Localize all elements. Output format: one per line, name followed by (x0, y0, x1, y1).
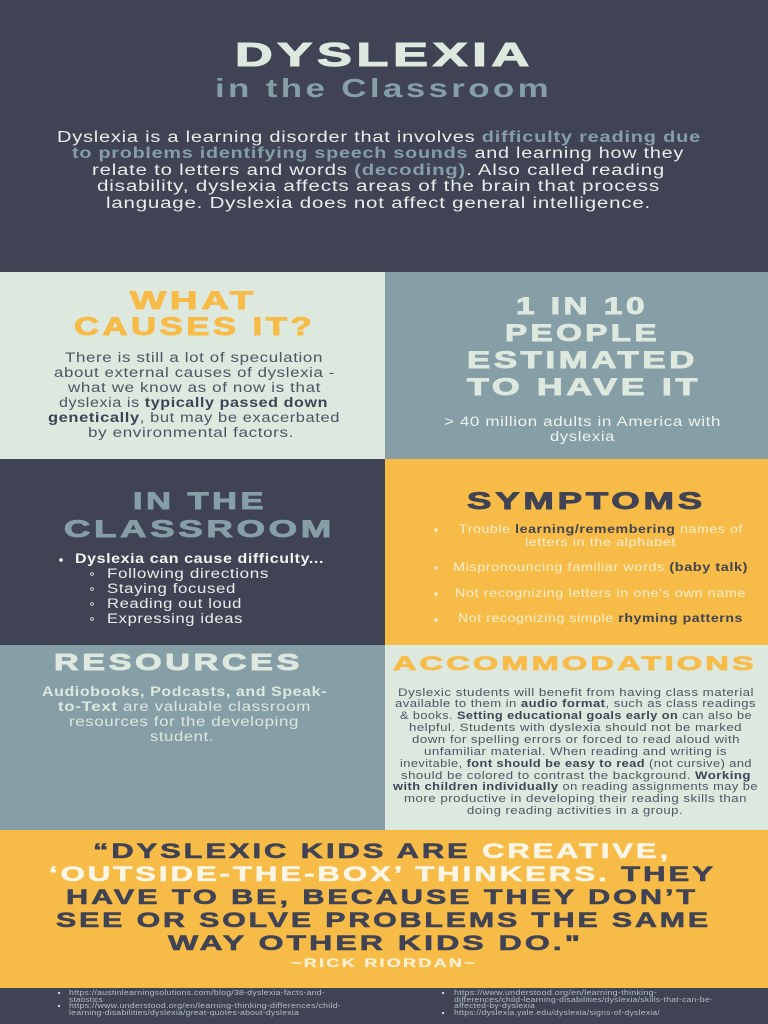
sources left column: https://www.understood.org/en/learning-thinking-differences/child- (69, 1003, 342, 1010)
quote attribution: ~RICK RIORDAN~ (291, 956, 477, 970)
symptoms list: Trouble learning/remembering names of (459, 522, 743, 536)
classroom list: Expressing ideas (107, 611, 243, 626)
heading: resources: RESOURCES (54, 649, 303, 675)
statistic heading: TO HAVE IT (467, 374, 701, 401)
classroom list: Staying focused (107, 581, 236, 596)
title: DYSLEXIA (235, 36, 534, 73)
statistic detail: > 40 million adults in America with (444, 414, 721, 429)
heading: accommodations: ACCOMMODATIONS (393, 654, 757, 675)
panel: quote (0, 830, 768, 988)
causes text: by environmental factors. (88, 425, 294, 440)
intro paragraph: relate to letters and words (decoding) . Also called reading (92, 162, 665, 179)
causes text: about external causes of dyslexia - (54, 365, 335, 380)
panel: 1 in 10 statistic (385, 272, 768, 459)
classroom list (59, 551, 324, 626)
symptoms list: Mispronouncing familiar words (baby talk) (453, 560, 748, 574)
symptoms list: Not recognizing simple rhyming patterns (458, 611, 743, 625)
panel: what causes it (0, 272, 385, 459)
sources right column (442, 990, 714, 1017)
sources left column: statistics (69, 997, 103, 1004)
intro paragraph: Dyslexia is a learning disorder that involves difficulty reading due (57, 129, 701, 146)
accommodations text: unfamiliar material. When reading and writing is (424, 746, 727, 758)
resources text (42, 684, 327, 744)
heading: in the classroom: IN THE (133, 488, 267, 515)
symptoms list (434, 522, 748, 625)
classroom list: Reading out loud (107, 596, 242, 611)
statistic detail (444, 414, 721, 444)
accommodations text: inevitable, font should be easy to read (not cursive) and (400, 758, 752, 770)
accommodations text: should be colored to contrast the background. Working (401, 770, 751, 782)
resources text: resources for the developing (69, 714, 299, 729)
heading: what causes it: CAUSES IT? (74, 313, 315, 341)
intro paragraph: language. Dyslexia does not affect general intelligence. (106, 195, 651, 212)
subtitle: in the Classroom (215, 73, 552, 103)
symptoms list: Not recognizing letters in one's own name (455, 586, 746, 600)
causes text (48, 350, 340, 440)
sources left column (58, 990, 342, 1017)
heading: symptoms: SYMPTOMS (467, 488, 706, 515)
statistic heading (467, 293, 701, 401)
causes text: what we know as of now is that (67, 380, 321, 395)
accommodations text: available to them in audio format , such as class readings (395, 698, 756, 710)
symptoms list: letters in the alphabet (525, 535, 676, 549)
panel: accommodations (385, 645, 768, 830)
causes text: genetically , but may be exacerbated (48, 410, 340, 425)
heading: in the classroom: CLASSROOM (64, 516, 335, 543)
sources right column: https://dyslexia.yale.edu/dyslexia/signs-of-dyslexia/ (454, 1010, 660, 1017)
quote text: WAY OTHER KIDS DO." (168, 932, 583, 955)
accommodations text (392, 687, 758, 817)
quote text: HAVE TO BE, BECAUSE THEY DON’T (66, 886, 698, 909)
accommodations text: helpful. Students with dyslexia should not be marked (409, 722, 742, 734)
accommodations text: & books. Setting educational goals early on can also be (400, 710, 752, 722)
intro paragraph (57, 129, 701, 212)
panel: header (0, 0, 768, 272)
sources right column: differences/child-learning-disabilities/dyslexia/skills-that-can-be- (454, 997, 714, 1004)
sources right column: https://www.understood.org/en/learning-thinking- (454, 990, 658, 997)
accommodations text: with children individually on reading assignments may be (392, 781, 758, 793)
heading: what causes it (74, 287, 315, 341)
accommodations text: down for spelling errors or forced to read aloud with (412, 734, 740, 746)
quote text: “DYSLEXIC KIDS ARE CREATIVE, (93, 840, 671, 863)
causes text: There is still a lot of speculation (65, 350, 323, 365)
resources text: Audiobooks, Podcasts, and Speak- (42, 684, 327, 699)
panel: sources footer (0, 988, 768, 1024)
accommodations text: doing reading activities in a group. (467, 805, 683, 817)
quote text: ‘OUTSIDE-THE-BOX’ THINKERS. THEY (49, 863, 716, 886)
panel: resources (0, 645, 385, 830)
panel: in the classroom (0, 459, 385, 645)
accommodations text: Dyslexic students will benefit from having class material (398, 687, 754, 699)
quote text: SEE OR SOLVE PROBLEMS THE SAME (56, 909, 711, 932)
resources text: student. (150, 729, 214, 744)
statistic heading: 1 IN 10 (516, 293, 648, 320)
statistic heading: ESTIMATED (467, 347, 698, 374)
sources right column: affected-by-dyslexia (454, 1003, 535, 1010)
heading: in the classroom (64, 488, 335, 543)
statistic heading: PEOPLE (505, 320, 660, 347)
intro paragraph: disability, dyslexia affects areas of the brain that process (97, 178, 660, 195)
statistic detail: dyslexia (550, 429, 615, 444)
sources left column: https://austinlearningsolutions.com/blog/38-dyslexia-facts-and- (69, 990, 326, 997)
classroom list: Following directions (107, 566, 269, 581)
accommodations text: more productive in developing their reading skills than (404, 793, 747, 805)
sources left column: learning-disabilities/dyslexia/great-quotes-about-dyslexia (69, 1010, 299, 1017)
heading: what causes it: WHAT (130, 287, 257, 315)
panel: symptoms (385, 459, 768, 645)
causes text: dyslexia is typically passed down (59, 395, 328, 410)
intro paragraph: to problems identifying speech sounds and learning how they (72, 145, 684, 162)
resources text: to-Text are valuable classroom (58, 699, 311, 714)
classroom list: Dyslexia can cause difficulty... (75, 551, 324, 566)
quote text (49, 840, 716, 955)
